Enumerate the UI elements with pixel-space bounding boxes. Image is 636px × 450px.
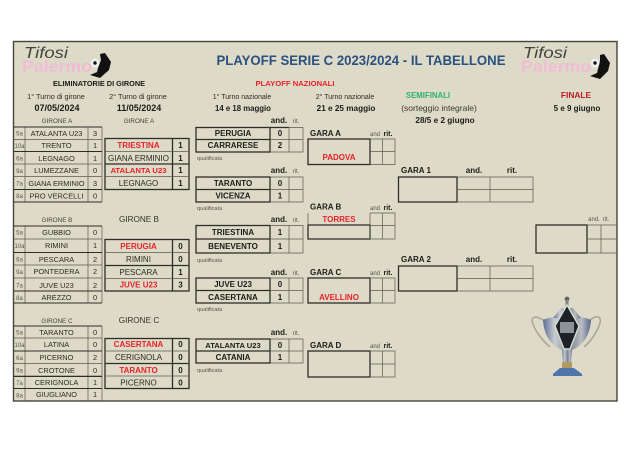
table: girone A first round: PRO VERCELLI (30, 192, 83, 200)
match: semifinal Gara 1 (398, 166, 533, 202)
table: girone A first round: 1 (93, 141, 97, 150)
match: Gara B: TORRES (322, 215, 356, 224)
match: Triestina Benevento: 1 (278, 242, 283, 251)
table: girone C first round: CERIGNOLA (35, 378, 78, 387)
match: Gara B: and (370, 206, 380, 212)
table: girone B second round: PESCARA (119, 268, 158, 277)
table: girone C second round: 0 (178, 353, 183, 362)
match: final (536, 217, 617, 253)
match: Taranto Vicenza: TARANTO (214, 179, 252, 188)
heading: semifinali: (sorteggio integrale) (401, 103, 477, 113)
match: Gara A (308, 129, 395, 164)
table: girone A first round: GIANA ERMINIO (28, 179, 85, 188)
table: girone C first round: 1 (93, 390, 97, 399)
match: final: and. (588, 217, 600, 223)
table: girone A first round: ATALANTA U23 (31, 129, 82, 138)
table: girone B first round: GUBBIO (42, 228, 71, 237)
table: girone B first round: 0 (93, 293, 97, 302)
table: girone B second round (105, 240, 189, 291)
match: semifinal Gara 2 (398, 255, 533, 291)
table: girone B first round: 9a (16, 270, 23, 276)
table: girone A first round: 0 (93, 192, 97, 200)
table: girone A second round: 1 (178, 154, 183, 163)
match: Atalanta U23 Catania: CATANIA (216, 353, 251, 362)
match: Atalanta U23 Catania (196, 328, 303, 374)
match: Triestina Benevento: and. (271, 215, 287, 224)
match: Juve U23 Casertana: qualificata (197, 307, 223, 313)
match: Juve U23 Casertana: CASERTANA (208, 293, 258, 302)
match: Juve U23 Casertana: JUVE U23 (214, 280, 252, 289)
heading: semifinali (401, 91, 477, 125)
match: Triestina Benevento: BENEVENTO (208, 242, 258, 251)
panel: bracket background (14, 42, 617, 401)
table: girone B first round: 0 (93, 228, 97, 237)
heading: playoff nazionali: 21 e 25 maggio (317, 104, 375, 113)
heading: girone C labels (41, 316, 159, 325)
table: girone A first round: 6a (16, 156, 23, 162)
match: Taranto Vicenza (196, 166, 303, 212)
match: Gara D: and (370, 344, 380, 350)
table: girone B first round: 1 (93, 241, 97, 250)
table: girone B first round: 6a (16, 258, 23, 264)
table: girone B first round: PONTEDERA (34, 267, 80, 276)
table: girone A second round: GIANA ERMINIO (108, 154, 169, 163)
icon: trophy (532, 297, 600, 376)
heading: semifinali: 28/5 e 2 giugno (415, 116, 475, 125)
match: Triestina Benevento: TRIESTINA (212, 228, 254, 237)
match: Atalanta U23 Catania: and. (271, 328, 287, 337)
table: girone C second round: 0 (178, 340, 183, 349)
table: girone A second round: 1 (178, 179, 183, 188)
table: girone C second round: CERIGNOLA (115, 353, 163, 362)
heading: eliminatorie di girone: 07/05/2024 (34, 103, 80, 113)
table: girone B second round: 1 (178, 268, 183, 277)
match: semifinal Gara 1: GARA 1 (401, 166, 431, 175)
table: girone C second round: PICERNO (120, 378, 157, 388)
table: girone A first round: 5a (16, 132, 23, 138)
match: semifinal Gara 2: and. (466, 255, 482, 264)
heading: girone B labels: GIRONE B (119, 215, 160, 224)
match: Gara A: rit. (384, 131, 393, 138)
match: Atalanta U23 Catania: rit. (293, 331, 300, 337)
table: girone A first round: 0 (93, 166, 97, 175)
table: girone C second round: TARANTO (119, 366, 158, 375)
table: girone A first round: 10a (14, 144, 25, 150)
match: Gara D (308, 341, 395, 377)
table: girone C first round: 0 (93, 366, 97, 375)
heading: girone B labels (42, 215, 160, 224)
heading: playoff nazionali: PLAYOFF NAZIONALI (256, 79, 334, 88)
heading: girone C labels: GIRONE C (119, 316, 159, 325)
table: girone C first round: LATINA (44, 340, 69, 349)
match: Gara B: rit. (384, 205, 393, 212)
table: girone B first round: 2 (93, 281, 97, 290)
heading: playoff nazionali (213, 79, 375, 113)
match: Taranto Vicenza: and. (271, 166, 287, 175)
table: girone A first round: 3 (93, 179, 97, 188)
match: Taranto Vicenza: qualificata (197, 206, 223, 212)
table: girone C first round: GIUGLIANO (36, 390, 77, 399)
table: girone C first round: CROTONE (38, 366, 75, 375)
match: Gara A: PADOVA (322, 153, 356, 162)
match: Juve U23 Casertana: rit. (293, 271, 300, 277)
table: girone C first round: PICERNO (40, 353, 74, 362)
table: girone C first round: 6a (16, 356, 23, 362)
heading: finale: 5 e 9 giugno (554, 104, 600, 113)
match: Gara A: GARA A (310, 129, 341, 138)
match: Atalanta U23 Catania: 1 (278, 353, 283, 362)
logo: Tifosi Palermo right: Palermo (521, 57, 591, 76)
table: girone C first round: 9a (16, 368, 23, 374)
heading: eliminatorie di girone: ELIMINATORIE DI GIRONE (53, 79, 145, 88)
match: Gara B: GARA B (310, 202, 341, 212)
table: girone B second round: 3 (178, 280, 183, 290)
match: Juve U23 Casertana (196, 268, 303, 313)
match: Triestina Benevento: qualificata (197, 258, 223, 264)
match: Perugia Carrarese: rit. (293, 119, 300, 125)
heading: eliminatorie di girone: 1° Turno di girone (27, 92, 85, 101)
table: girone A first round: TRENTO (41, 141, 72, 150)
match: Atalanta U23 Catania: 0 (278, 341, 283, 350)
table: girone C second round: CASERTANA (114, 340, 164, 349)
table: girone B second round: 0 (178, 255, 183, 264)
match: Taranto Vicenza: 1 (278, 192, 283, 200)
table: girone A second round: 1 (178, 166, 183, 175)
table: girone B first round: PESCARA (39, 255, 74, 264)
match: semifinal Gara 2: GARA 2 (401, 255, 431, 264)
table: girone A first round (14, 127, 102, 202)
table: girone C second round: 0 (178, 378, 183, 388)
table: girone B first round: 5a (16, 230, 23, 236)
table: girone C second round (105, 338, 189, 388)
table: girone B first round: AREZZO (42, 293, 72, 302)
table: girone B first round: 7a (16, 284, 23, 290)
logo: Tifosi Palermo left (22, 45, 111, 78)
match: Gara C (308, 268, 395, 303)
table: girone C first round: 0 (93, 340, 97, 349)
match: Perugia Carrarese: qualificata (197, 156, 223, 162)
match: Juve U23 Casertana: 1 (278, 293, 283, 302)
table: girone C first round: 1 (93, 378, 97, 387)
table: girone B second round: 0 (178, 242, 183, 251)
match: Taranto Vicenza: rit. (293, 169, 300, 175)
table: girone B first round: 8a (16, 296, 23, 302)
match: Gara D: GARA D (310, 341, 341, 350)
match: Gara C: and (370, 271, 380, 277)
match: Perugia Carrarese: 0 (278, 129, 283, 138)
match: Perugia Carrarese: 2 (278, 141, 283, 150)
title: PLAYOFF SERIE C 2023/2024 - IL TABELLONE (216, 52, 506, 68)
match: Atalanta U23 Catania: ATALANTA U23 (205, 341, 261, 350)
heading: finale: FINALE (561, 90, 592, 100)
logo: Tifosi Palermo left: Palermo (22, 57, 92, 76)
table: girone C first round: TARANTO (39, 328, 74, 337)
heading: playoff nazionali: 1° Turno nazionale (213, 93, 271, 101)
match: Gara D: rit. (384, 343, 393, 350)
match: Taranto Vicenza: VICENZA (215, 192, 251, 200)
table: girone B first round: 2 (93, 267, 97, 276)
table: girone A first round: 9a (16, 169, 23, 175)
match: Atalanta U23 Catania: qualificata (197, 368, 223, 374)
table: girone C first round (14, 326, 102, 401)
match: Triestina Benevento: rit. (293, 218, 300, 224)
heading: girone B labels: GIRONE B (42, 217, 72, 224)
match: final: rit. (603, 217, 610, 223)
heading: playoff nazionali: 2° Turno nazionale (316, 93, 374, 101)
table: girone B second round: RIMINI (126, 255, 151, 264)
logo: Tifosi Palermo left: Tifosi (24, 45, 69, 62)
table: girone C first round: 2 (93, 353, 97, 362)
table: girone C first round: 0 (93, 328, 97, 337)
match: Triestina Benevento: 1 (278, 228, 283, 237)
table: girone A second round: LEGNAGO (119, 179, 158, 188)
table: girone A second round: TRIESTINA (117, 141, 160, 150)
heading: eliminatorie di girone: GIRONE A (124, 118, 155, 125)
match: Taranto Vicenza: 0 (278, 179, 283, 188)
match: Triestina Benevento (196, 215, 303, 264)
logo: Tifosi Palermo right: Tifosi (523, 45, 568, 62)
match: semifinal Gara 1: and. (466, 166, 482, 175)
table: girone A first round: 8a (16, 194, 23, 200)
match: Gara C: rit. (384, 270, 393, 277)
heading: eliminatorie di girone: GIRONE A (42, 118, 73, 125)
table: girone A first round: 3 (93, 129, 97, 138)
match: Perugia Carrarese: PERUGIA (215, 129, 251, 138)
table: girone C first round: 5a (16, 330, 23, 336)
match: semifinal Gara 2: rit. (507, 255, 517, 264)
table: girone B first round: JUVE U23 (39, 281, 74, 290)
heading: finale (554, 90, 600, 113)
match: Gara C: GARA C (310, 268, 341, 277)
heading: semifinali: SEMIFINALI (406, 91, 450, 100)
table: girone B first round: RIMINI (45, 241, 68, 250)
match: Gara A: and (370, 132, 380, 138)
match: Perugia Carrarese: and. (271, 116, 287, 125)
match: Gara C: AVELLINO (319, 293, 359, 302)
table: girone B first round: 10a (14, 244, 25, 250)
table: girone B first round (14, 226, 102, 303)
heading: girone C labels: GIRONE C (41, 318, 73, 325)
match: semifinal Gara 1: rit. (507, 166, 517, 175)
match: Perugia Carrarese: CARRARESE (208, 141, 259, 150)
heading: eliminatorie di girone: 2° Turno di girone (109, 92, 167, 101)
match: Juve U23 Casertana: 0 (278, 280, 283, 289)
heading: eliminatorie di girone (27, 79, 167, 125)
table: girone B second round: PERUGIA (120, 242, 157, 251)
table: girone A first round: 7a (16, 182, 23, 188)
table: girone A first round: 1 (93, 154, 97, 163)
table: girone A first round: LEGNAGO (38, 154, 75, 163)
table: girone B second round: JUVE U23 (120, 280, 158, 290)
table: girone A second round: ATALANTA U23 (110, 166, 167, 175)
table: girone A first round: LUMEZZANE (34, 166, 79, 175)
table: girone B first round: 2 (93, 255, 97, 264)
table: girone A second round: 1 (178, 141, 183, 150)
table: girone C first round: 10a (14, 343, 25, 349)
match: Perugia Carrarese (196, 116, 303, 162)
heading: eliminatorie di girone: 11/05/2024 (117, 103, 161, 113)
table: girone C first round: 8a (16, 394, 23, 400)
match: Gara B (308, 202, 395, 239)
table: girone C second round: 0 (178, 366, 183, 375)
table: girone C first round: 7a (16, 381, 23, 387)
heading: playoff nazionali: 14 e 18 maggio (215, 104, 271, 113)
table: girone A second round (105, 138, 189, 190)
logo: Tifosi Palermo right (521, 45, 610, 79)
match: Juve U23 Casertana: and. (271, 268, 287, 277)
